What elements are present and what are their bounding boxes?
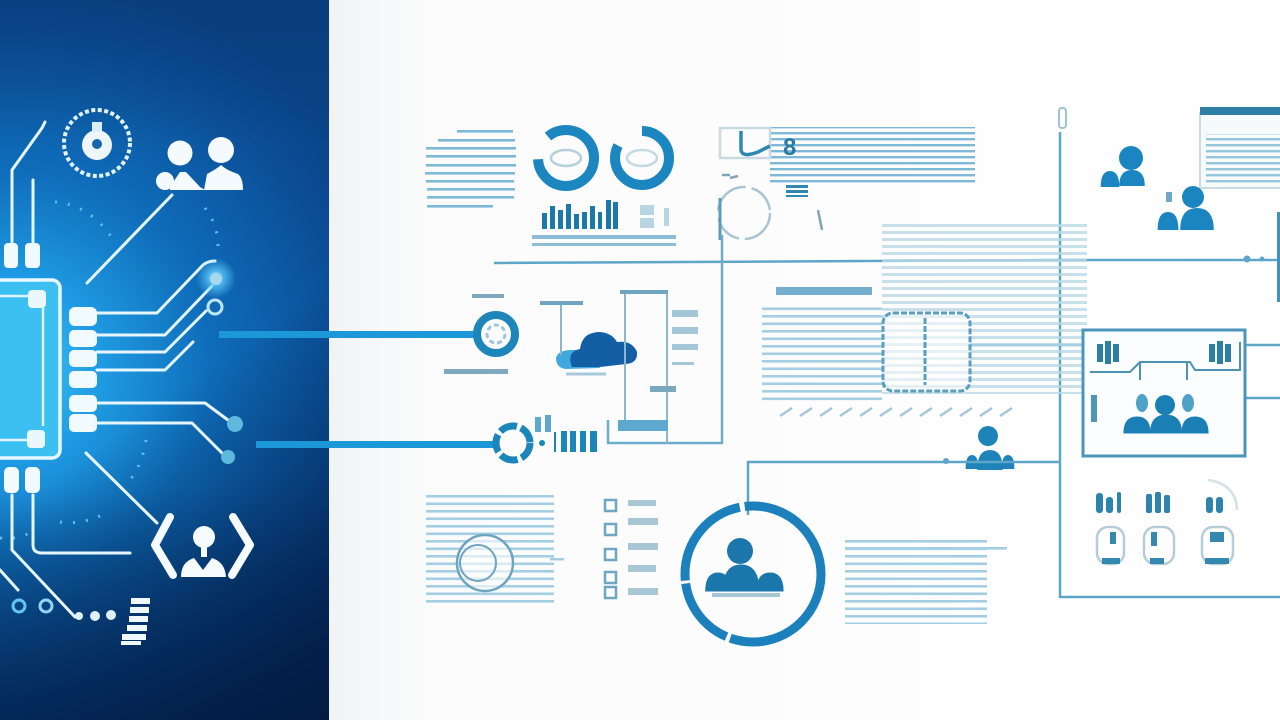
icon: team links — [1090, 342, 1240, 380]
text block: top center lines — [770, 127, 975, 185]
icon: team side bar — [1091, 395, 1097, 422]
icon: twin donuts — [527, 119, 669, 197]
icon: team people — [1123, 394, 1209, 434]
text block: target label lines — [444, 294, 508, 374]
icon: people top right — [1101, 146, 1145, 187]
icon: large ring with people — [685, 506, 821, 642]
right vertical connector — [1060, 132, 1280, 597]
text block: bottom right lines — [845, 540, 1007, 624]
icon: team badges — [1097, 341, 1231, 364]
connector: upper blue line — [219, 331, 474, 338]
right edge connectors — [968, 345, 1280, 398]
icon: circuit traces — [0, 122, 232, 617]
text block: top left lines — [425, 130, 516, 208]
icon: two people — [156, 137, 243, 190]
icon: people lower right — [1158, 186, 1214, 230]
text block: center left lines — [762, 287, 882, 405]
text block: center faded lines — [882, 224, 1087, 394]
icon: person in brackets — [155, 517, 250, 577]
connector: person link — [748, 462, 1060, 515]
connector: lower blue line — [256, 441, 494, 448]
bar chart: small bars — [532, 200, 676, 246]
right edge bar — [1277, 212, 1280, 302]
icon: sketch gauge — [718, 128, 822, 240]
icon: dotted money badge — [64, 110, 130, 176]
panel: team diagram box — [1083, 330, 1245, 456]
icon: target node upper — [477, 315, 515, 353]
list: checkbox rows — [605, 500, 658, 598]
main horizontal connector — [494, 260, 1280, 263]
right background — [329, 0, 1280, 720]
icon: sketch gauge: 8 — [783, 134, 796, 161]
icon: stacked bars bottom — [121, 598, 150, 645]
bar chart: lower bars — [535, 415, 597, 452]
chart: column fill — [618, 420, 668, 431]
icon: dashed box — [883, 313, 970, 391]
icon: target node lower — [496, 426, 530, 460]
icon: concentric sketch — [426, 492, 564, 607]
line nodes — [943, 256, 1264, 464]
icon row: bottom right sketch glyphs — [1096, 480, 1237, 564]
vertical connector — [608, 235, 722, 443]
icon: cloud — [556, 332, 637, 374]
text block: small tags — [650, 310, 698, 392]
icon: small node marker — [1059, 108, 1066, 128]
icon: dotted arcs — [0, 202, 218, 538]
icon: glowing nodes — [13, 258, 243, 621]
chart: column frame — [540, 292, 668, 443]
table panel: top right — [1200, 107, 1280, 188]
panel: blue circuit panel — [0, 0, 329, 720]
icon: person mid connector — [966, 426, 1014, 470]
hatch strip — [780, 408, 1012, 416]
icon: central chip — [0, 243, 97, 493]
